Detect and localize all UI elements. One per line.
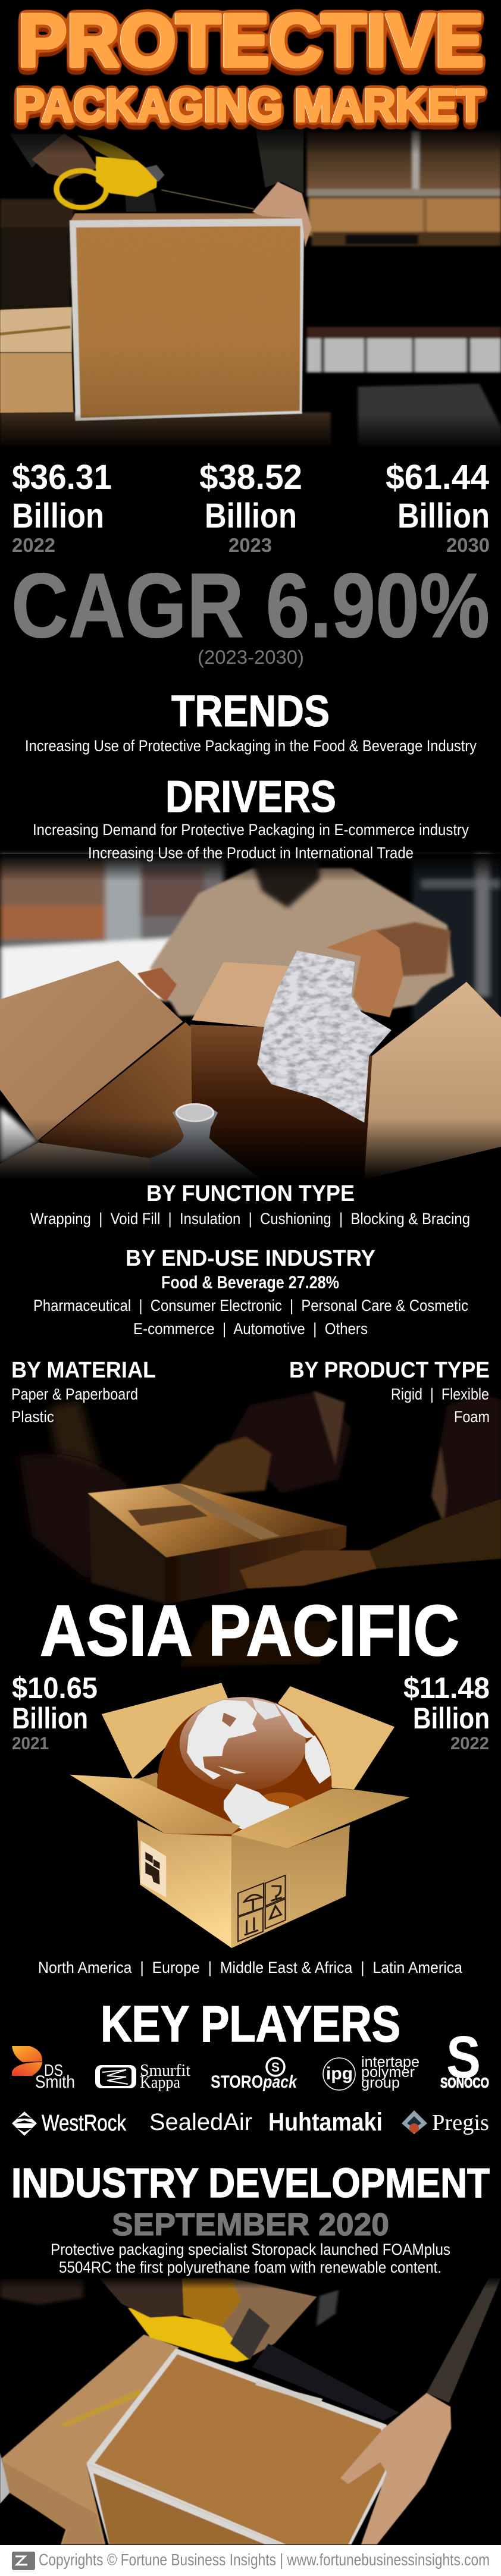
left hand [137, 968, 177, 1002]
logo: IPG: polymer [361, 2064, 415, 2081]
asia pacific 2022 value: 2022 [450, 1734, 489, 1753]
market size 2023 [199, 458, 302, 556]
main box side face [93, 2473, 265, 2544]
by material: Plastic [11, 1408, 54, 1426]
left flap [0, 961, 183, 1140]
back flap [192, 962, 292, 1027]
market size 2023: 2023 [228, 534, 272, 556]
right flap [364, 982, 501, 1179]
CAGR: (2023-2030) [198, 647, 304, 668]
asia pacific 2022 value: $11.48 [403, 1671, 490, 1705]
left hand [32, 134, 98, 179]
photo: hands passing a parcel [19, 1391, 501, 1667]
logo: IPG: ipg [326, 2064, 353, 2084]
drivers [33, 771, 469, 862]
inner back wall [190, 1024, 372, 1179]
by product type [289, 1358, 490, 1426]
right face [231, 1825, 350, 1948]
vase [150, 1104, 262, 1179]
logo: WestRock: WestRock [42, 2111, 127, 2136]
title: PROTECTIVE [18, 0, 484, 82]
photo: sealing a cardboard box with a tape dispenser [0, 122, 501, 450]
by product type: BY PRODUCT TYPE [289, 1358, 490, 1383]
bottom fade [0, 413, 501, 450]
other regions: North America | Europe | Middle East & Africa | Latin America [38, 1959, 462, 1976]
QR label [140, 1841, 166, 1897]
market size 2022: Billion [12, 497, 104, 535]
trends [25, 686, 477, 755]
right hand [326, 929, 403, 1018]
logo: Smurfit Kappa [95, 2061, 190, 2092]
market size 2022: 2022 [12, 534, 55, 556]
bottom hand and sleeve [240, 1550, 377, 1589]
illustration: globe in cardboard box [70, 1683, 410, 1948]
tape strip [252, 2343, 399, 2421]
logo: DS Smith: Smith [35, 2072, 75, 2092]
market size 2022: $36.31 [12, 458, 112, 497]
asia pacific heading: ASIA PACIFIC [40, 1590, 459, 1671]
drivers: Increasing Demand for Protective Packaging in E-commerce industry [33, 821, 469, 839]
development description: Protective packaging specialist Storopack launched FOAMplus [51, 2241, 450, 2258]
logo: IPG: group [361, 2075, 400, 2091]
asia pacific 2022 value [403, 1671, 490, 1753]
top fade [0, 854, 501, 881]
left face [137, 1820, 231, 1948]
by material: BY MATERIAL [11, 1358, 156, 1383]
logo: WestRock [12, 2111, 127, 2136]
market size 2030: 2030 [446, 534, 490, 556]
main box white edge [86, 2348, 388, 2544]
tape dispenser [179, 2278, 241, 2327]
box top face [88, 1483, 347, 1557]
right hand [252, 182, 312, 247]
front left flap [0, 1143, 249, 1179]
logo: DS Smith: DS [44, 2061, 63, 2079]
light glow [48, 1400, 102, 1491]
main box [70, 213, 304, 223]
market size 2023: $38.52 [199, 458, 302, 497]
development description: 5504RC the first polyurethane foam with renewable content. [59, 2258, 441, 2276]
person in beige shirt [150, 868, 454, 1016]
box left face [88, 1493, 166, 1604]
title: PACKAGING MARKET [15, 79, 484, 131]
main box top face [95, 2354, 385, 2544]
market size 2030: $61.44 [386, 458, 489, 497]
development date: SEPTEMBER 2020 [112, 2207, 389, 2242]
market size 2023: Billion [205, 497, 297, 535]
market size 2022 [12, 458, 112, 556]
footer [0, 2545, 501, 2576]
asia pacific 2021 value: $10.65 [12, 1671, 98, 1705]
asia pacific 2021 value: Billion [12, 1702, 88, 1735]
fingers [99, 2278, 184, 2318]
hand [340, 2393, 451, 2544]
key players heading: KEY PLAYERS [101, 1996, 400, 2053]
logo: Huhtamaki: Huhtamaki [268, 2108, 383, 2136]
front flaps [70, 1775, 240, 1834]
by end-use industry: BY END-USE INDUSTRY [126, 1246, 375, 1271]
by product type: Rigid | Flexible [391, 1385, 489, 1403]
drivers: DRIVERS [165, 771, 336, 821]
development description [51, 2241, 450, 2276]
asia pacific 2021 value [12, 1671, 98, 1753]
logo: Storopack [211, 2058, 298, 2092]
logo: IPG [323, 2054, 419, 2091]
by material [11, 1358, 156, 1426]
market size 2030: Billion [397, 497, 490, 535]
globe [157, 1697, 331, 1871]
jacket [230, 1391, 352, 1493]
continents [187, 1700, 257, 1780]
back flaps [102, 1683, 229, 1778]
logo: DS Smith [12, 2046, 75, 2092]
handling symbols [238, 1875, 286, 1941]
logo: Smurfit Kappa: Kappa [140, 2073, 180, 2092]
top fade [0, 2276, 501, 2289]
logo: Storopack: S [271, 2060, 280, 2075]
by end-use industry [33, 1246, 468, 1338]
top hand [179, 1436, 271, 1499]
trends: TRENDS [171, 686, 330, 736]
by function type [30, 1181, 470, 1228]
market size 2030 [386, 458, 490, 556]
drivers: Increasing Use of the Product in International Trade [88, 844, 414, 862]
by end-use industry: E-commerce | Automotive | Others [133, 1320, 368, 1338]
inner left wall [40, 1022, 192, 1158]
logo: Storopack: STOROpack [211, 2072, 298, 2092]
photo: bubble wrap in open box [0, 854, 501, 1180]
asia pacific 2021 value: 2021 [12, 1734, 49, 1753]
title [15, 0, 484, 131]
tape dispenser [124, 187, 156, 212]
bubble wrap [257, 950, 392, 1122]
by material: Paper & Paperboard [11, 1385, 138, 1403]
sleeve [427, 2278, 501, 2403]
logo: IPG: intertape [361, 2054, 419, 2070]
logo: Sonoco: S [446, 2024, 481, 2091]
top fade [0, 122, 501, 155]
by product type: Foam [454, 1408, 490, 1426]
shipping box on left [0, 307, 72, 353]
logo: Smurfit Kappa: Smurfit [140, 2061, 190, 2080]
logo: Pregis: Pregis [432, 2110, 489, 2135]
photo: taping a box from above [0, 2276, 501, 2544]
by function type: BY FUNCTION TYPE [146, 1181, 355, 1206]
pencil [60, 2389, 142, 2427]
logo: Sealed Air: SealedAir [149, 2109, 252, 2135]
tape band [161, 1483, 280, 1539]
logo: Pregis [402, 2110, 489, 2135]
back box [192, 2278, 317, 2361]
person sleeve [256, 129, 303, 193]
footer logo [12, 2552, 35, 2570]
bottom fade [0, 1118, 501, 1180]
right forearm [374, 922, 450, 976]
by end-use industry: Food & Beverage 27.28% [161, 1273, 339, 1292]
box right face [166, 1526, 347, 1604]
